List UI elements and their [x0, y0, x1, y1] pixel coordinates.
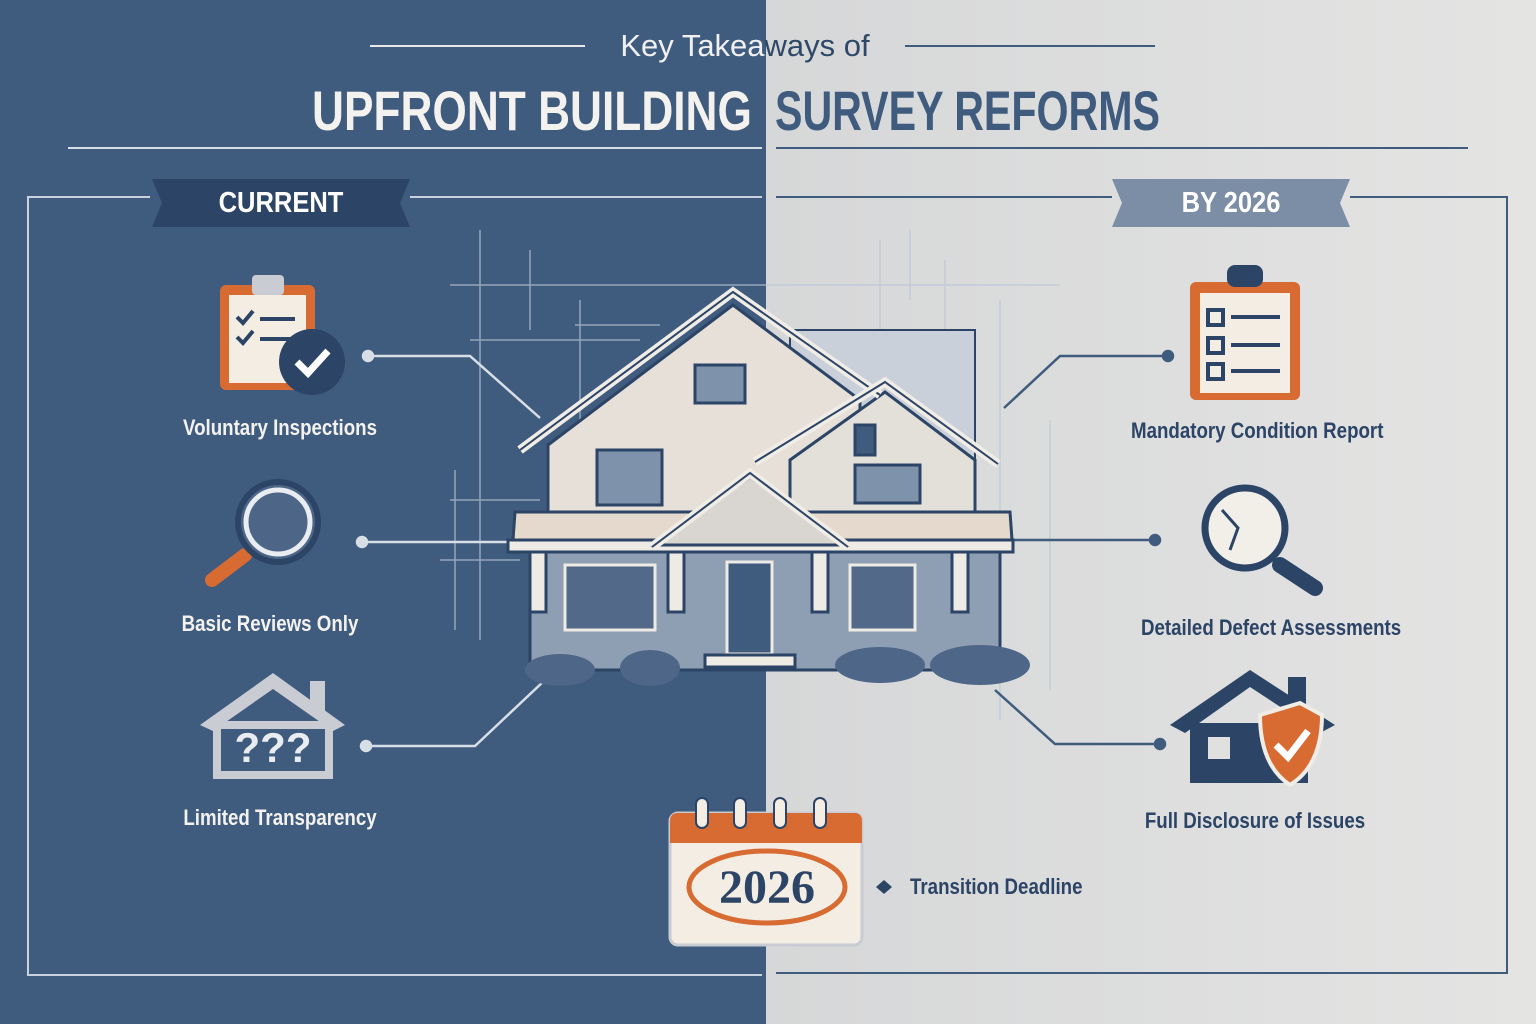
caption: Full Disclosure of Issues [1145, 808, 1365, 833]
item: basic reviews [182, 479, 358, 636]
icon: clipboard checklist [1190, 265, 1300, 400]
item: detailed defect assessments [1141, 484, 1401, 640]
left background [0, 0, 766, 1024]
caption: Basic Reviews Only [182, 611, 358, 636]
icon: magnifier [205, 479, 321, 587]
banner: by 2026 [1112, 179, 1350, 227]
icon: clipboard with check [220, 275, 345, 395]
caption: Limited Transparency [183, 805, 377, 830]
title [312, 28, 1160, 142]
item: voluntary inspections [183, 275, 377, 440]
banner: by 2026: BY 2026 [1182, 187, 1280, 219]
icon: house with question marks: ??? [235, 724, 311, 771]
banner: current: CURRENT [219, 187, 343, 219]
main heading: SURVEY REFORMS [775, 79, 1160, 142]
item: full disclosure [1145, 670, 1365, 833]
icon: house with shield [1170, 670, 1335, 787]
calendar 2026 [668, 797, 864, 946]
main heading [312, 79, 1160, 142]
subtitle: Key Takeaways of [620, 28, 870, 63]
caption: Voluntary Inspections [183, 415, 377, 440]
connector lines [357, 351, 545, 751]
right background [766, 0, 1536, 1024]
caption: Detailed Defect Assessments [1141, 615, 1401, 640]
main heading: UPFRONT BUILDING [312, 79, 752, 142]
house illustration [506, 286, 1030, 686]
icon: house with question marks [200, 673, 345, 779]
calendar 2026: 2026 [719, 861, 815, 914]
caption: Mandatory Condition Report [1131, 418, 1383, 443]
banner: current [152, 179, 410, 227]
item: limited transparency [183, 673, 377, 830]
icon: magnifier with crack [1202, 484, 1323, 596]
deadline label: Transition Deadline [910, 874, 1082, 899]
item: mandatory condition report [1131, 265, 1384, 443]
